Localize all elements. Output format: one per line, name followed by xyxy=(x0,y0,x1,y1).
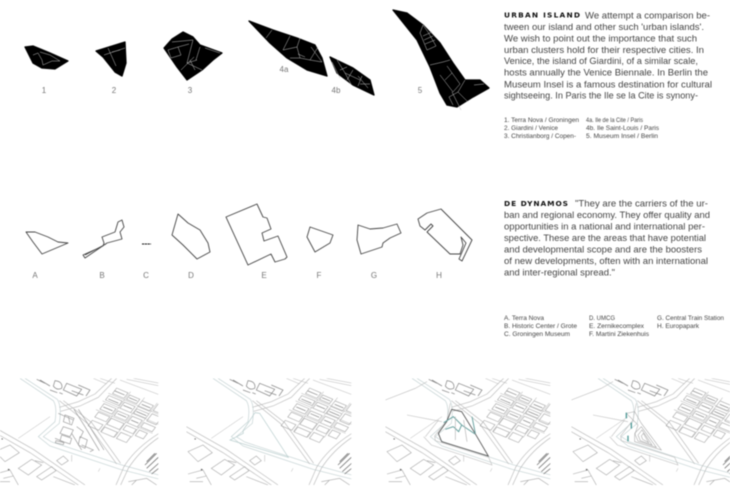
teal route lines xyxy=(444,417,475,434)
island 1 Terra Nova: 1 xyxy=(42,86,47,95)
legend: dynamos: G. Central Train Station xyxy=(657,316,724,322)
outline D UMCG: D xyxy=(188,271,194,280)
island 4a Ile de la Cite: 4a xyxy=(280,65,289,74)
island 4b Ile Saint-Louis xyxy=(330,57,374,95)
text block: urban island description: Museum Insel is a famous destination for cultural xyxy=(504,80,712,90)
outline F Martini Ziekenhuis xyxy=(307,227,333,280)
outline F Martini Ziekenhuis: F xyxy=(317,271,322,280)
text block: de dynamos description: spective. These are the areas that have potential xyxy=(504,233,706,244)
legend: urban islands: 3. Christianborg / Copen- xyxy=(504,134,576,140)
legend: dynamos: H. Europapark xyxy=(657,324,700,330)
text block: urban island description: hosts annually the Venice Biennale. In Berlin the xyxy=(504,68,708,78)
legend: urban islands xyxy=(504,118,659,140)
map 1: existing site with buildings xyxy=(0,378,171,485)
map 4: terraced landform with teal markers xyxy=(571,378,730,485)
outline A Terra Nova: A xyxy=(32,271,38,280)
legend: urban islands: 4a. Ile de la Cite / Paris xyxy=(586,118,643,124)
text block: de dynamos description: "They are the carriers of the ur- xyxy=(575,198,708,210)
panel: de dynamos outlines xyxy=(26,204,472,280)
map 3: design outline with teal routes xyxy=(385,378,563,485)
legend: dynamos: B. Historic Center / Grote xyxy=(504,324,578,330)
text block: urban island description: sightseeing. In Paris the Ile se la Cite is synony- xyxy=(504,90,698,102)
legend: dynamos: E. Zernikecomplex xyxy=(589,324,644,330)
text block: urban island description: urban clusters hold for their respective cities. In xyxy=(504,45,704,56)
outline G Central Train Station xyxy=(357,224,401,280)
panel: urban island silhouettes xyxy=(25,10,489,110)
dark site contour xyxy=(438,409,488,456)
outline E Zernikecomplex: E xyxy=(261,271,267,280)
island 5 Museum Insel: 5 xyxy=(418,86,423,95)
text block: urban island description: Venice, the island of Giardini, of a similar scale, xyxy=(504,56,698,67)
legend: dynamos: A. Terra Nova xyxy=(504,316,545,322)
island 2 Giardini xyxy=(96,42,126,95)
heading: urban island: URBAN ISLAND xyxy=(504,10,580,20)
outline G Central Train Station: G xyxy=(371,271,377,280)
text block: urban island description: We wish to point out the importance that such xyxy=(504,34,697,44)
text block: de dynamos description: ban and regional economy. They offer quality and xyxy=(504,210,710,221)
outline B Historic Center xyxy=(83,220,124,280)
island 4b Ile Saint-Louis: 4b xyxy=(332,86,341,95)
outline A Terra Nova xyxy=(26,232,68,280)
text block: de dynamos description: of new developments, often with an international xyxy=(504,256,708,267)
text block: de dynamos description xyxy=(504,198,710,278)
heading: de dynamos: DE DYNAMOS xyxy=(504,199,568,208)
legend: dynamos xyxy=(504,316,724,338)
island 3 Christianborg xyxy=(164,32,222,95)
landform contours xyxy=(626,412,661,450)
legend: urban islands: 5. Museum Insel / Berlin xyxy=(586,134,658,140)
legend: urban islands: 4b. Ile Saint-Louis / Paris xyxy=(586,126,659,132)
outline D UMCG xyxy=(172,214,210,280)
island 5 Museum Insel xyxy=(393,10,489,110)
island 2 Giardini: 2 xyxy=(112,86,117,95)
outline C Groningen Museum: C xyxy=(143,271,149,280)
legend: urban islands: 2. Giardini / Venice xyxy=(504,126,559,132)
map 2: cleared site with teal outline xyxy=(186,378,364,485)
teal markers xyxy=(626,413,631,441)
island 1 Terra Nova xyxy=(25,46,68,95)
outline H Europapark xyxy=(418,209,472,280)
outline E Zernikecomplex xyxy=(226,204,287,280)
text block: urban island description xyxy=(504,10,712,102)
text block: de dynamos description: and developmental scope and are the boosters xyxy=(504,244,702,256)
legend: dynamos: F. Martini Ziekenhuis xyxy=(589,332,649,338)
legend: dynamos: C. Groningen Museum xyxy=(504,332,570,338)
outline C Groningen Museum xyxy=(142,244,151,280)
legend: dynamos: D. UMCG xyxy=(589,316,615,322)
outline B Historic Center: B xyxy=(99,271,105,280)
island 3 Christianborg: 3 xyxy=(188,86,193,95)
text block: de dynamos description: and inter-regional spread." xyxy=(504,268,615,278)
text block: urban island description: We attempt a comparison be- xyxy=(585,10,710,22)
legend: urban islands: 1. Terra Nova / Groningen xyxy=(504,118,579,124)
text block: de dynamos description: opportunities in a national and international per- xyxy=(504,222,705,232)
island 4a Ile de la Cite xyxy=(249,21,327,76)
outline H Europapark: H xyxy=(436,271,442,280)
text block: urban island description: tween our island and other such 'urban islands'. xyxy=(504,22,704,33)
